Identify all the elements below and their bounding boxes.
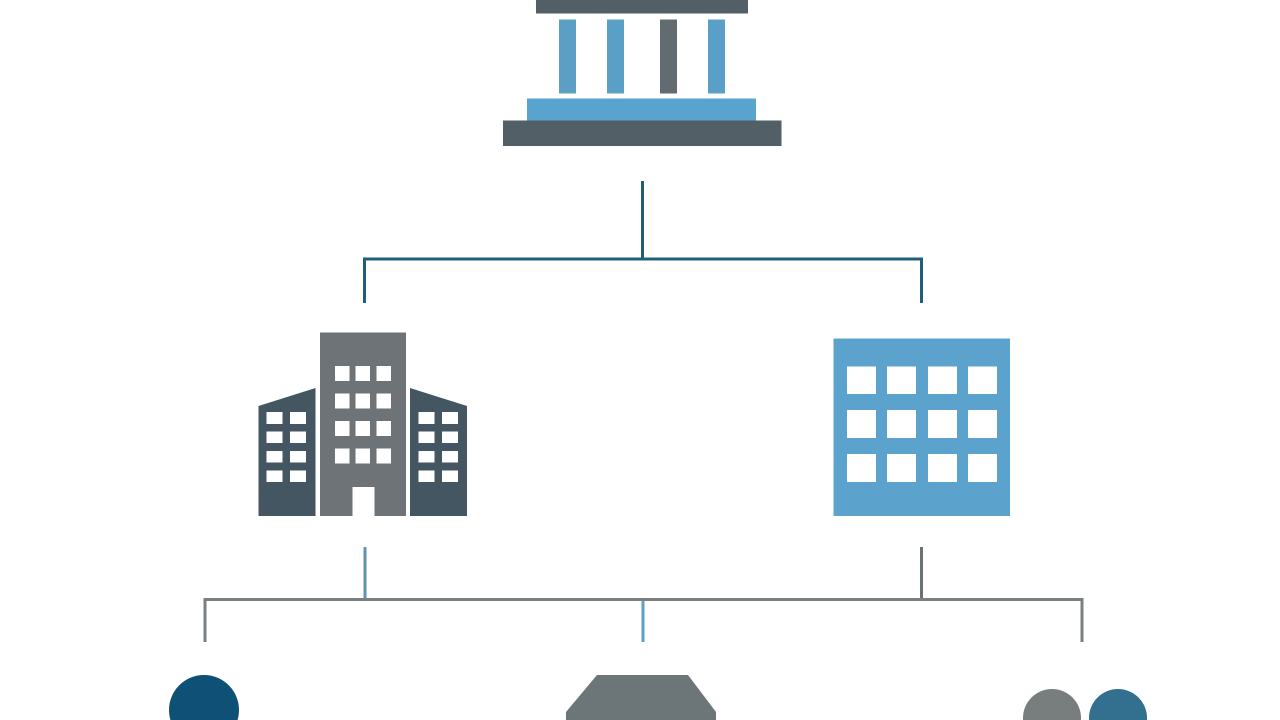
icon: grey octagon — [566, 675, 716, 720]
connector: second tier to third tier — [205, 547, 1082, 642]
right wing — [410, 388, 467, 516]
icon: two people heads — [1023, 689, 1147, 720]
central tower — [320, 332, 406, 516]
left wing — [258, 388, 316, 516]
icon: blue block building — [834, 338, 1010, 516]
connector: institution to second tier — [364, 181, 922, 303]
icon: person head, dark blue — [169, 675, 239, 720]
icon: institution building with columns — [503, 0, 782, 146]
icon: office tower group — [258, 332, 467, 516]
